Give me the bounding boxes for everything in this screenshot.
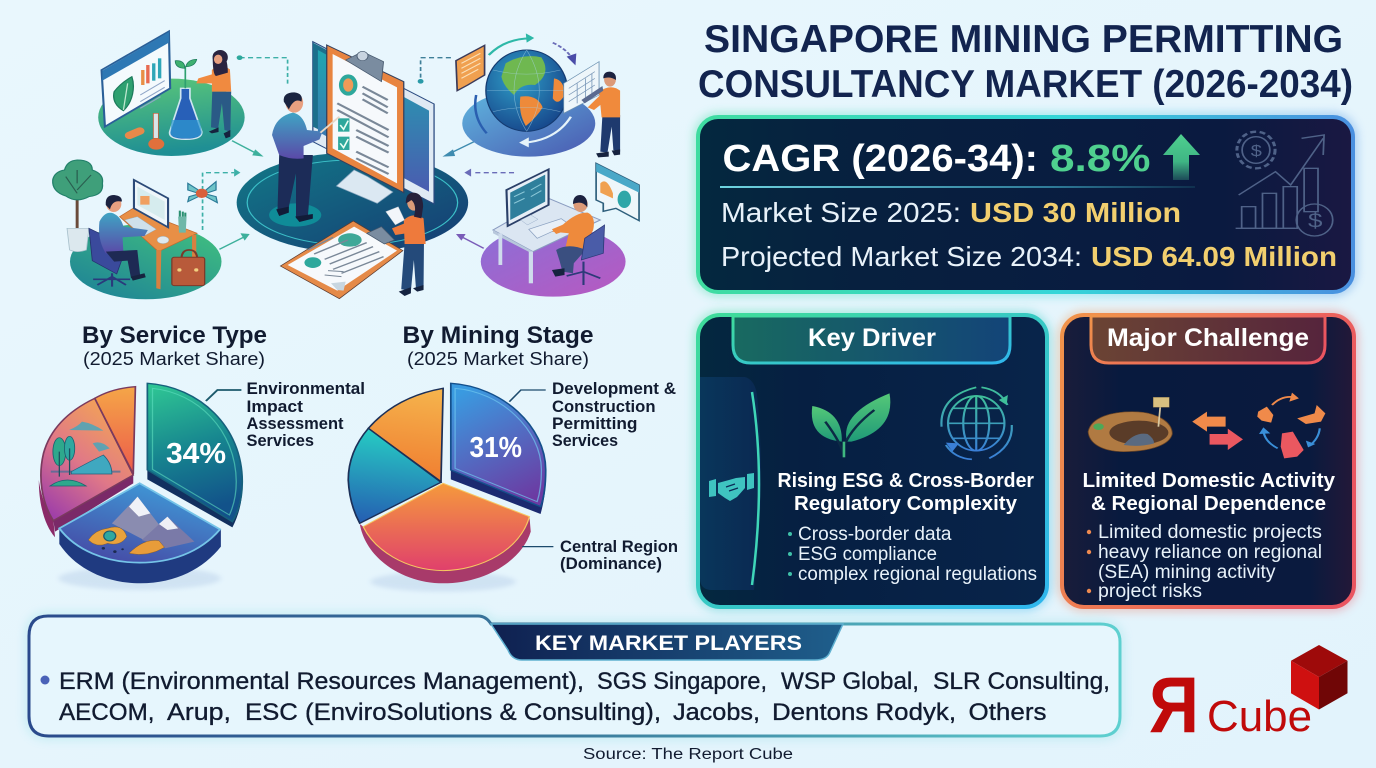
chart value: 34%: 34%: [166, 438, 226, 470]
icon: growth chart: [1236, 132, 1333, 236]
monitor: [313, 42, 434, 204]
players list: [40, 668, 1110, 726]
person: woman with plant: [196, 50, 231, 138]
icon: chart speech bubble: [596, 163, 639, 221]
logo: RCube: [1149, 645, 1348, 749]
vignette: environmental lab: [98, 31, 245, 156]
dashed connector arrows: [203, 55, 514, 249]
pie chart: service type: [39, 383, 242, 590]
chart heading: by mining stage: By Mining Stage: [402, 322, 594, 349]
title: CONSULTANCY MARKET (2026-2034): [698, 63, 1353, 106]
person: seated analyst: [552, 195, 605, 285]
key driver heading: Rising ESG & Cross-Border: [778, 469, 1034, 492]
chart label: environmental impact assessment services: Impact: [246, 398, 304, 416]
side strip with handshake: [700, 377, 761, 590]
slice: orange: [368, 388, 443, 482]
players list: Arup,: [167, 699, 231, 726]
person: seated consultant: [89, 195, 148, 287]
players list: SLR Consulting,: [933, 668, 1110, 695]
major challenge heading: [1082, 469, 1336, 515]
slice: teal: [348, 428, 441, 523]
icon: growth chart: $: [1251, 142, 1262, 159]
chart heading: by mining stage: (2025 Market Share): [407, 348, 589, 369]
key driver list: Cross-border data: [798, 524, 952, 545]
leader lines: [509, 390, 553, 547]
icon: red cube: [1291, 645, 1348, 710]
chart heading: by service type: (2025 Market Share): [83, 348, 265, 369]
players list: Dentons Rodyk,: [772, 699, 956, 726]
chart label: development & construction permitting services: Construction: [552, 398, 656, 416]
slice: development & construction 31%: [451, 383, 546, 514]
tab: key market players: KEY MARKET PLAYERS: [535, 632, 802, 655]
icon: exchange arrows: [1192, 412, 1243, 450]
chart label: development & construction permitting services: [552, 380, 676, 450]
tab: key market players: [491, 624, 843, 660]
logo: RCube: Cube: [1207, 692, 1312, 741]
logo: RCube: Я: [1149, 660, 1199, 749]
title: SINGAPORE MINING PERMITTING: [704, 18, 1343, 61]
icon: green leaves: [812, 393, 890, 457]
clipboard document: [327, 45, 404, 193]
person: analyst with tablet: [581, 72, 620, 157]
chart label: central region: (Dominance): [560, 555, 662, 573]
tab: key driver: Key Driver: [808, 324, 936, 352]
players list: WSP Global,: [781, 668, 919, 695]
chart label: environmental impact assessment services: Assessment: [246, 415, 344, 433]
icon: regional map: [1257, 393, 1325, 458]
major challenge list: [1087, 522, 1322, 602]
panel: major challenge: [1062, 315, 1354, 607]
tab: major challenge: Major Challenge: [1107, 324, 1309, 352]
players list: Others: [968, 699, 1046, 726]
projected market size 2034: Projected Market Size 2034:: [721, 241, 1082, 272]
players list: AECOM,: [59, 699, 154, 726]
chart heading: by service type: By Service Type: [82, 322, 267, 349]
tab: major challenge: [1091, 316, 1325, 363]
key driver list: ESG compliance: [798, 544, 937, 565]
chart label: development & construction permitting services: Development &: [552, 380, 676, 398]
chart label: central region: [560, 538, 678, 573]
icon: handshake: [709, 473, 754, 501]
central platform: [237, 42, 468, 299]
chart heading: by mining stage: [402, 322, 594, 369]
chart label: central region: Central Region: [560, 538, 678, 556]
source: Source: The Report Cube: [583, 746, 793, 763]
title: [698, 18, 1353, 106]
slice: mining: [59, 483, 221, 583]
market size 2025: Market Size 2025:: [721, 197, 961, 228]
chart label: environmental impact assessment services: Services: [246, 432, 314, 450]
players list: ERM (Environmental Resources Management),: [59, 668, 584, 695]
key driver list: complex regional regulations: [798, 564, 1037, 585]
market size 2025: [721, 197, 1181, 228]
illustration: permitting consultancy scene: [53, 31, 639, 299]
pie chart: mining stage: [348, 383, 553, 592]
slice: landscape: [39, 387, 135, 537]
major challenge list: heavy reliance on regional: [1098, 542, 1322, 563]
chart label: development & construction permitting services: Services: [552, 432, 618, 450]
key driver heading: [778, 469, 1034, 515]
icon: mine pit: [1088, 397, 1172, 452]
chart label: development & construction permitting services: Permitting: [552, 415, 638, 433]
chart label: environmental impact assessment services: [246, 380, 365, 450]
icon: molecule gadget: [188, 182, 217, 203]
major challenge heading: Limited Domestic Activity: [1082, 469, 1336, 492]
panel: key driver: [698, 315, 1047, 607]
vignette: data analyst desk: [481, 163, 639, 297]
major challenge list: Limited domestic projects: [1098, 522, 1322, 543]
major challenge list: project risks: [1098, 581, 1202, 602]
chart label: environmental impact assessment services: Environmental: [246, 380, 365, 398]
panel: market size: [698, 117, 1353, 292]
tab: key driver: [733, 316, 1010, 363]
leader line: [206, 390, 241, 401]
major challenge list: (SEA) mining activity: [1098, 562, 1276, 583]
key driver heading: Regulatory Complexity: [794, 492, 1018, 515]
panel: key market players: [29, 616, 1120, 736]
person: lead consultant: [272, 92, 339, 222]
icon: up arrow: [1163, 134, 1200, 180]
cagr line: CAGR (2026-34):: [722, 138, 1038, 180]
major challenge heading: & Regional Dependence: [1091, 492, 1326, 515]
person: woman with document: [386, 193, 426, 296]
slice: central region: [360, 483, 531, 583]
players list: ESC (EnviroSolutions & Consulting),: [245, 699, 661, 726]
vignette: desk with tree: [53, 160, 222, 299]
cagr line: 8.8%: [1050, 138, 1150, 180]
chart value: 31%: 31%: [470, 432, 522, 464]
players list: Jacobs,: [673, 699, 760, 726]
players list: SGS Singapore,: [597, 668, 767, 695]
icon: growth chart: $: [1308, 209, 1323, 232]
market size 2025: USD 30 Million: [970, 197, 1181, 228]
lower clipboard: [280, 221, 403, 299]
vignette: globe: [456, 33, 620, 157]
slice: environmental impact assessment 34%: [147, 383, 242, 527]
projected market size 2034: USD 64.09 Million: [1091, 241, 1337, 272]
chart heading: by service type: [82, 322, 267, 369]
projected market size 2034: [721, 241, 1337, 272]
icon: globe: [941, 387, 1012, 459]
key driver list: [788, 524, 1037, 585]
